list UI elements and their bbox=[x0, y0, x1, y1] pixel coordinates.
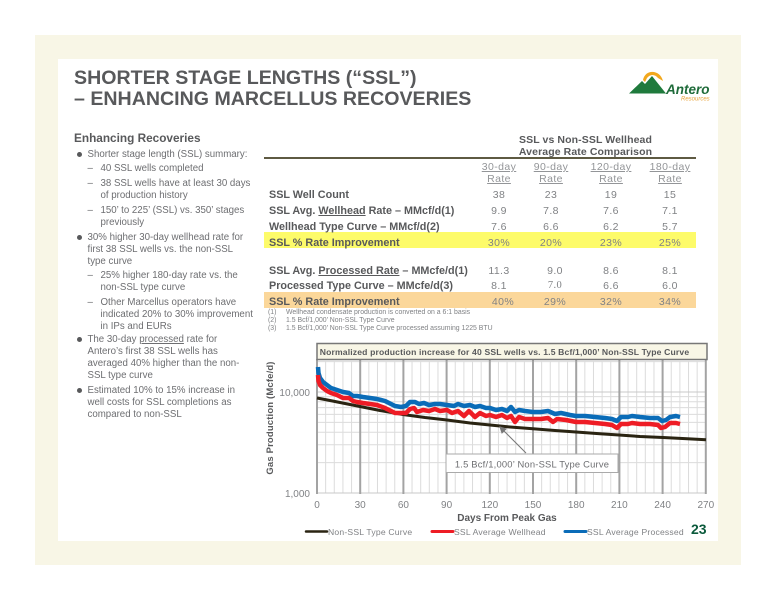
highlight band: yellow bbox=[264, 232, 696, 248]
sub-bullet: 25% higher bbox=[88, 270, 238, 293]
row: SSL Avg Wellhead Rate: 7.8 bbox=[543, 205, 559, 217]
header rule bbox=[264, 157, 696, 159]
bullet: well costs: well costs for SSL completions as bbox=[88, 397, 231, 408]
row: SSL % Rate Improvement processed: 40% bbox=[492, 296, 514, 308]
legend bbox=[306, 527, 684, 537]
panel: enhancing recoveries bullet text: 25% higher 180-day rate vs. the bbox=[100, 270, 238, 281]
row: SSL % Rate Improvement wellhead: SSL % Rate Improvement bbox=[269, 237, 400, 249]
white slide panel bbox=[58, 59, 718, 541]
bullet: processed rate: SSL type curve bbox=[88, 370, 153, 381]
row: Wellhead Type Curve: 5.7 bbox=[662, 221, 678, 233]
x axis labels: 0 bbox=[314, 500, 320, 511]
column header: 30-day bbox=[482, 161, 516, 185]
row: SSL Well Count: 15 bbox=[664, 189, 676, 201]
row: SSL Well Count: 38 bbox=[493, 189, 505, 201]
row: Processed Type Curve: 6.0 bbox=[662, 280, 678, 292]
sub-bullet: wells completed: – bbox=[88, 163, 93, 174]
row: SSL Well Count: SSL Well Count bbox=[269, 189, 349, 201]
x axis labels: 270 bbox=[697, 500, 715, 511]
x axis labels: 210 bbox=[611, 500, 628, 511]
panel: enhancing recoveries bullet text: in IPs and EURs bbox=[100, 321, 172, 332]
footnotes: (2) bbox=[268, 317, 276, 324]
table heading: SSL vs Non-SSL Wellhead bbox=[519, 134, 652, 146]
sub-bullet: stage length: – bbox=[88, 205, 93, 216]
logo: Antero Resources bbox=[629, 72, 710, 102]
legend: SSL Average Processed bbox=[587, 527, 684, 537]
page number: 23 bbox=[691, 521, 707, 537]
panel: enhancing recoveries bullet text: of production history bbox=[100, 190, 188, 201]
row: SSL Avg Wellhead Rate: 9.9 bbox=[491, 205, 507, 217]
footnotes: 1.5 Bcf/1,000’ Non-SSL Type Curve bbox=[286, 317, 395, 324]
sub-bullet: production history bbox=[88, 178, 250, 201]
bullet: well costs bbox=[88, 385, 235, 420]
chart title box bbox=[317, 344, 707, 360]
x axis title: Days From Peak Gas bbox=[457, 513, 557, 524]
row: SSL Avg Wellhead Rate: SSL Avg. Wellhead Rate – MMcf/d(1) bbox=[269, 205, 454, 217]
row: SSL % Rate Improvement wellhead: 23% bbox=[600, 237, 622, 249]
title bbox=[74, 67, 471, 110]
panel: enhancing recoveries bullet text: 40 SSL wells completed bbox=[100, 163, 204, 174]
panel: enhancing recoveries bullet text: non-SSL type curve bbox=[100, 282, 185, 293]
row: SSL Avg Processed Rate: 9.0 bbox=[547, 265, 563, 277]
chart title box: Normalized production increase for 40 SSL wells vs. 1.5 Bcf/1,000’ Non-SSL Type Curve bbox=[320, 347, 689, 357]
title: SHORTER STAGE LENGTHS (“SSL”) bbox=[74, 67, 417, 89]
row: SSL Avg Processed Rate: 8.6 bbox=[603, 265, 619, 277]
bullet marker bbox=[76, 152, 82, 156]
row: Wellhead Type Curve: 6.2 bbox=[603, 221, 619, 233]
bullet: well costs: Estimated 10% to 15% increase in bbox=[88, 385, 235, 396]
row: SSL Avg Processed Rate: 11.3 bbox=[488, 265, 510, 277]
line: SSL average wellhead bbox=[318, 375, 680, 428]
heading: Enhancing Recoveries: Enhancing Recoveries bbox=[74, 131, 201, 145]
panel: enhancing recoveries bullet text: Other Marcellus operators have bbox=[100, 297, 236, 308]
bullet: processed rate: The 30-day processed rate for bbox=[88, 334, 217, 345]
bullet: processed rate: Antero’s first 38 SSL wells has bbox=[88, 346, 218, 357]
column header: 90-day: 90-day bbox=[534, 161, 568, 173]
bullet: 30% higher: type curve bbox=[88, 256, 132, 267]
footnotes: (1) bbox=[268, 309, 276, 316]
x axis labels: 60 bbox=[398, 500, 409, 511]
row: Processed Type Curve: Processed Type Curve – MMcfe/d(3) bbox=[269, 280, 453, 292]
row: SSL % Rate Improvement wellhead: 20% bbox=[540, 237, 562, 249]
footnotes: (3) bbox=[268, 325, 276, 332]
sub-bullet: other operators bbox=[88, 297, 253, 332]
panel: rate comparison table bbox=[264, 134, 696, 332]
panel: enhancing recoveries bullet text: 150’ to 225’ (SSL) vs. 350’ stages bbox=[100, 205, 244, 216]
row: SSL Avg Wellhead Rate bbox=[269, 205, 678, 217]
bullet: summary: Shorter stage length (SSL) summary: bbox=[88, 149, 247, 160]
row: SSL Avg Wellhead Rate: 7.1 bbox=[662, 205, 678, 217]
row: SSL Well Count: 23 bbox=[545, 189, 557, 201]
sub-bullet: wells completed bbox=[88, 163, 204, 174]
row: SSL % Rate Improvement processed bbox=[269, 296, 681, 308]
table heading bbox=[519, 134, 652, 158]
panel: enhancing recoveries bullet text bbox=[74, 131, 253, 420]
x axis labels bbox=[314, 500, 715, 511]
highlight band: orange bbox=[264, 292, 696, 308]
row: SSL Avg Processed Rate: 8.1 bbox=[662, 265, 678, 277]
row: Processed Type Curve bbox=[269, 280, 678, 292]
legend: SSL Average Wellhead bbox=[454, 527, 546, 537]
line: SSL average processed bbox=[318, 367, 680, 421]
row: Wellhead Type Curve bbox=[269, 221, 678, 233]
row: SSL % Rate Improvement processed: SSL % Rate Improvement bbox=[269, 296, 400, 308]
footnotes: 1.5 Bcf/1,000’ Non-SSL Type Curve processed assuming 1225 BTU bbox=[286, 325, 493, 332]
table heading: Average Rate Comparison bbox=[519, 146, 652, 158]
bullet: 30% higher: 30% higher 30-day wellhead rate for bbox=[88, 232, 243, 243]
column header: 30-day: 30-day bbox=[482, 161, 516, 173]
line: non-SSL type curve bbox=[317, 398, 706, 440]
sub-bullet: other operators: – bbox=[88, 297, 93, 308]
y axis labels bbox=[279, 388, 310, 500]
title: – ENHANCING MARCELLUS RECOVERIES bbox=[74, 88, 471, 110]
x axis labels: 30 bbox=[355, 500, 366, 511]
row: Processed Type Curve: 8.1 bbox=[491, 280, 507, 292]
sub-bullet: 25% higher: – bbox=[88, 270, 93, 281]
column header: 180-day bbox=[650, 161, 690, 185]
column header: 90-day bbox=[534, 161, 568, 185]
bullet: processed rate bbox=[88, 334, 239, 381]
row: Wellhead Type Curve: 6.6 bbox=[543, 221, 559, 233]
annotation: type curve label: 1.5 Bcf/1,000’ Non-SSL Type Curve bbox=[455, 458, 609, 470]
row: SSL Well Count bbox=[269, 189, 676, 201]
bullet marker bbox=[76, 336, 82, 342]
y axis labels: 1,000 bbox=[285, 489, 310, 500]
column header: 180-day: Rate bbox=[658, 173, 682, 185]
row: SSL % Rate Improvement processed: 29% bbox=[544, 296, 566, 308]
bullet: processed rate: averaged 40% higher than the non- bbox=[88, 358, 239, 369]
logo: Antero Resources: Antero bbox=[665, 82, 710, 97]
bullet marker bbox=[76, 388, 82, 392]
row: SSL Well Count: 19 bbox=[605, 189, 617, 201]
bullet: 30% higher: first 38 SSL wells vs. the non-SSL bbox=[88, 244, 233, 255]
legend: Non-SSL Type Curve bbox=[328, 527, 412, 537]
row: SSL % Rate Improvement wellhead: 25% bbox=[659, 237, 681, 249]
row: SSL % Rate Improvement processed: 32% bbox=[600, 296, 622, 308]
bullet: well costs: compared to non-SSL bbox=[88, 409, 182, 420]
panel: enhancing recoveries bullet text: indicated 20% to 30% improvement bbox=[100, 309, 253, 320]
column header: 30-day: Rate bbox=[487, 173, 511, 185]
column header: 120-day: Rate bbox=[599, 173, 623, 185]
row: SSL % Rate Improvement processed: 34% bbox=[659, 296, 681, 308]
y axis labels: 10,000 bbox=[279, 388, 310, 399]
bullet: 30% higher bbox=[88, 232, 243, 267]
bullet marker bbox=[76, 234, 82, 240]
row: SSL Avg Processed Rate: SSL Avg. Processed Rate – MMcfe/d(1) bbox=[269, 265, 468, 277]
panel: enhancing recoveries bullet text: previously bbox=[100, 217, 144, 228]
annotation: type curve label bbox=[446, 454, 618, 472]
x axis labels: 240 bbox=[654, 500, 671, 511]
x axis labels: 90 bbox=[441, 500, 453, 511]
row: SSL % Rate Improvement wellhead: 30% bbox=[488, 237, 510, 249]
row: Processed Type Curve: 6.6 bbox=[603, 280, 619, 292]
sub-bullet: production history: – bbox=[88, 178, 93, 189]
column header: 180-day: 180-day bbox=[650, 161, 690, 173]
annotation arrow bbox=[500, 427, 526, 453]
column header: 120-day: 120-day bbox=[591, 161, 631, 173]
y axis title: Gas Production (Mcfe/d) bbox=[265, 361, 276, 475]
column header: 120-day bbox=[590, 161, 632, 185]
row: Wellhead Type Curve: Wellhead Type Curve – MMcf/d(2) bbox=[269, 221, 440, 233]
row: SSL % Rate Improvement wellhead bbox=[269, 237, 681, 249]
row: SSL Avg Wellhead Rate: 7.6 bbox=[603, 205, 619, 217]
footnotes bbox=[268, 308, 493, 332]
row: SSL Avg Processed Rate bbox=[269, 265, 678, 277]
footnotes: Wellhead condensate production is converted on a 6:1 basis bbox=[286, 309, 470, 316]
x axis labels: 180 bbox=[568, 500, 585, 511]
logo: Antero Resources: Resources bbox=[681, 96, 710, 102]
x axis labels: 150 bbox=[525, 500, 542, 511]
row: Processed Type Curve: 7.0 bbox=[548, 280, 562, 291]
row: Wellhead Type Curve: 7.6 bbox=[491, 221, 507, 233]
column header: 90-day: Rate bbox=[539, 173, 563, 185]
sub-bullet: stage length bbox=[88, 205, 244, 228]
x axis labels: 120 bbox=[481, 500, 499, 511]
panel: enhancing recoveries bullet text: 38 SSL wells have at least 30 days bbox=[100, 178, 250, 189]
